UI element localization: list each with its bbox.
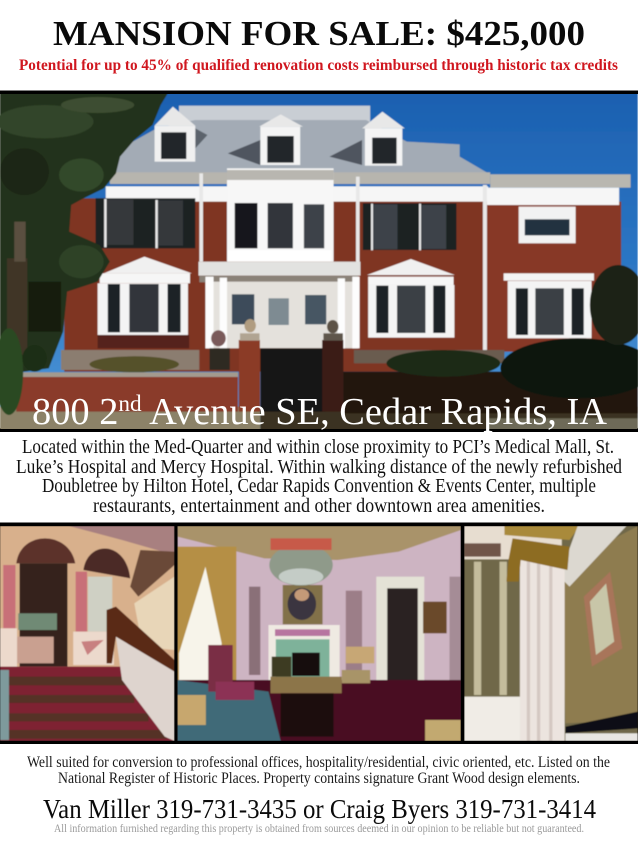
photo: parlor with chandelier — [177, 526, 461, 741]
slate roof — [110, 120, 492, 176]
bay window — [227, 168, 334, 262]
conversion description: National Register of Historic Places. Property contains signature Grant Wood design elements. — [58, 770, 580, 787]
roof balustrade — [179, 106, 370, 124]
downspouts — [199, 173, 203, 262]
tree — [0, 92, 169, 372]
portico — [199, 262, 360, 276]
photo panel: mansion exterior — [0, 90, 638, 433]
brick walls — [64, 198, 486, 372]
subtitle: tax credits: Potential for up to 45% of qualified renovation costs reimbursed through historic tax credits — [19, 57, 618, 74]
location description: restaurants, entertainment and other downtown area amenities. — [93, 495, 545, 517]
conversion description — [27, 754, 610, 787]
small attic window in wing — [519, 207, 576, 243]
upper windows right — [363, 203, 456, 250]
upper windows left — [96, 198, 195, 248]
front garden wall — [16, 373, 238, 412]
photo strip: interiors — [0, 522, 638, 744]
photo: grand staircase — [0, 526, 175, 741]
dormers — [155, 107, 195, 126]
contact line: Van Miller 319-731-3435 or Craig Byers 319-731-3414 — [43, 794, 596, 824]
foundation — [61, 350, 199, 370]
location description — [16, 436, 622, 517]
photo: fluted column — [464, 526, 638, 741]
gate — [260, 348, 325, 412]
address overlay: 800 2 — [32, 391, 118, 433]
address overlay: nd — [118, 391, 142, 416]
hedges — [386, 350, 500, 377]
address overlay: Avenue SE, Cedar Rapids, IA — [142, 391, 608, 433]
ground strip — [0, 407, 260, 430]
gate posts — [239, 340, 260, 412]
title: MANSION FOR SALE: $425,000 — [53, 14, 585, 53]
cornice — [110, 172, 490, 184]
planters — [211, 330, 226, 346]
lower pediment windows — [104, 257, 192, 273]
